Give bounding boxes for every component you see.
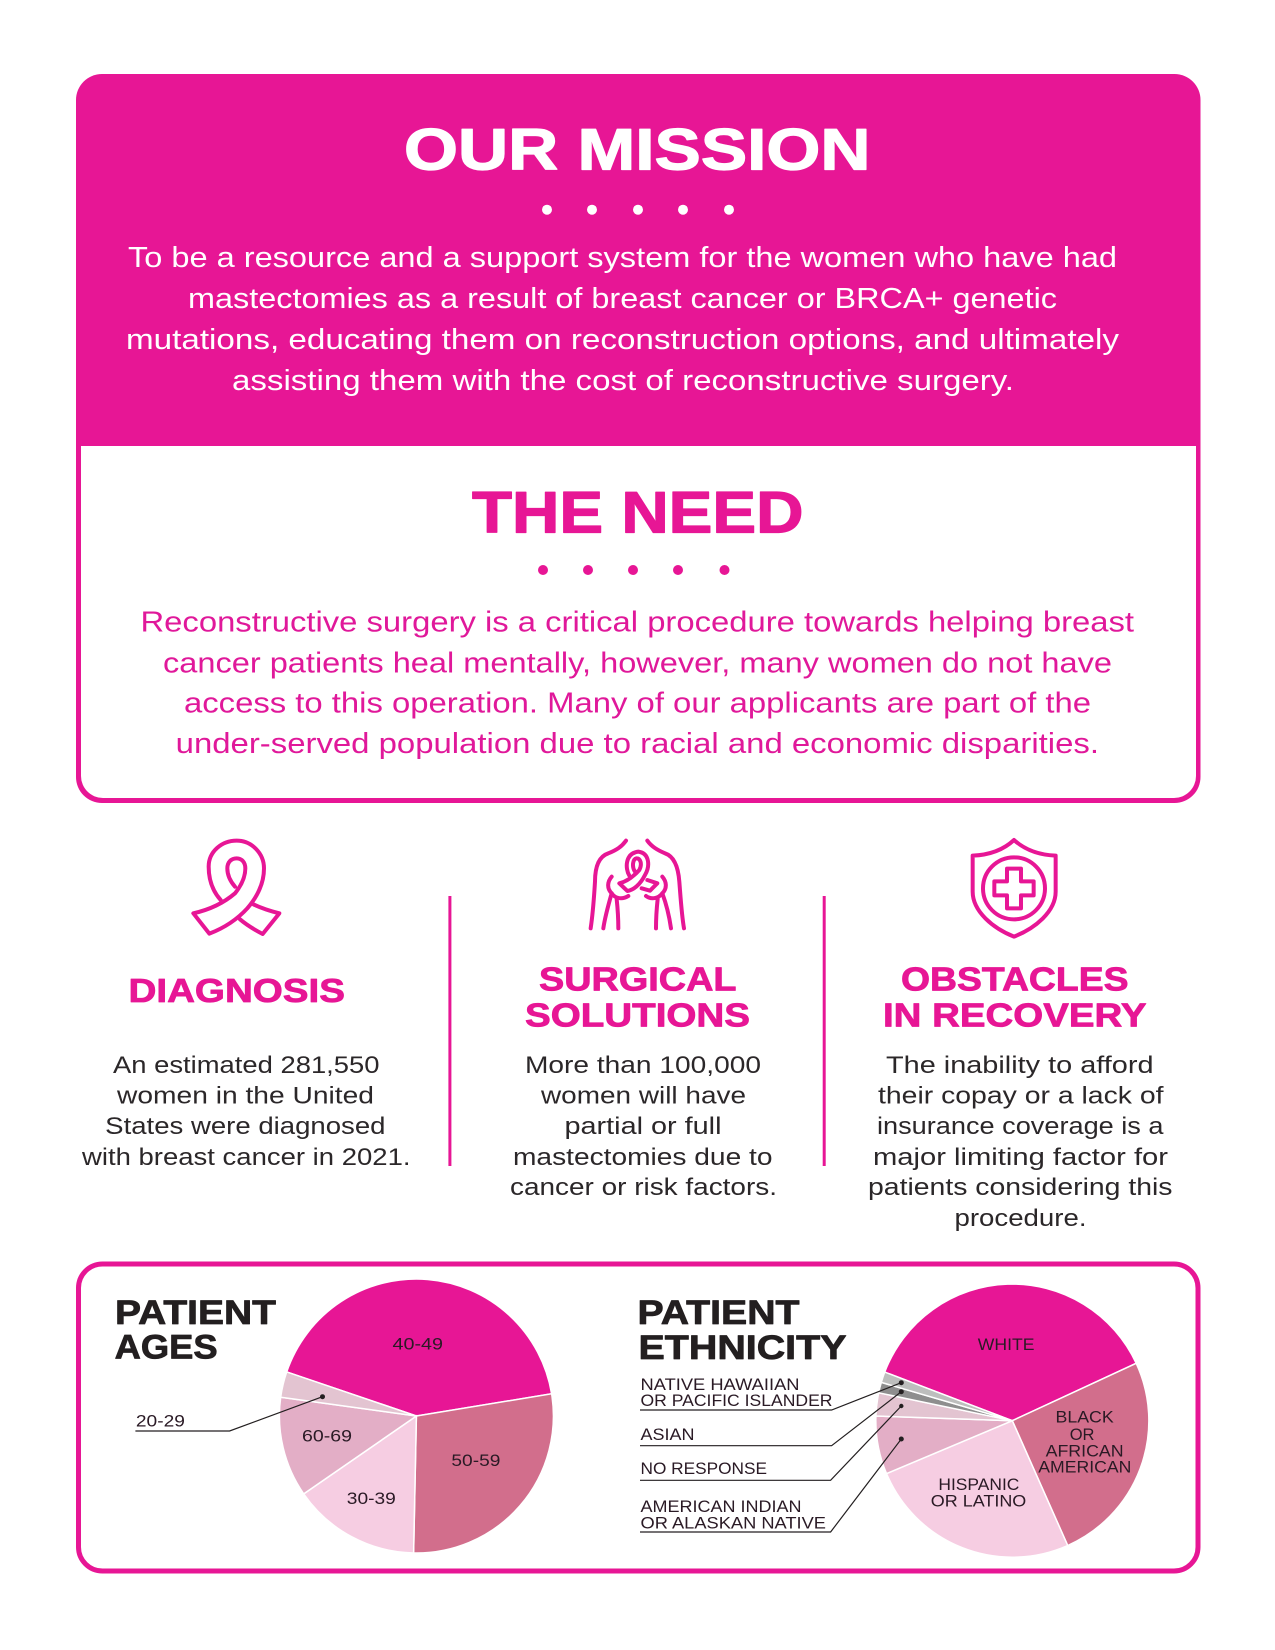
text: diagnosis copy: States were diagnosed	[105, 1113, 385, 1140]
text: diagnosis copy: with breast cancer in 2021.	[81, 1144, 411, 1171]
text: diagnosis copy: women in the United	[116, 1083, 374, 1110]
labels: ethnicity slices	[931, 1336, 1131, 1511]
text block: need statement: access to this operation. Many of our applicants are part of the	[184, 688, 1091, 720]
text: obstacles copy	[868, 1052, 1172, 1232]
heading: surgical solutions: SURGICAL	[539, 961, 736, 998]
heading: the need: THE NEED	[472, 480, 804, 546]
callout: native hawaiian or pacific islander: OR PACIFIC ISLANDER	[640, 1392, 833, 1410]
heading: surgical solutions	[525, 961, 750, 1034]
text: diagnosis copy: An estimated 281,550	[113, 1052, 380, 1079]
text: surgical copy	[510, 1052, 777, 1201]
heading: obstacles in recovery: IN RECOVERY	[883, 997, 1146, 1034]
heading: patient ages	[115, 1294, 276, 1367]
heading: surgical solutions: SOLUTIONS	[525, 997, 750, 1034]
panel: mission and need card	[76, 74, 1200, 803]
callout: american indian or alaskan native	[640, 1436, 904, 1533]
icon: awareness ribbon	[193, 841, 279, 934]
labels: ethnicity slices: AFRICAN	[1046, 1443, 1124, 1461]
labels: ethnicity slices: OR LATINO	[931, 1493, 1026, 1511]
labels: age slices	[302, 1335, 500, 1508]
labels: age slices: 40-49	[392, 1335, 443, 1353]
icon: torso with ribbon	[591, 841, 684, 928]
labels: age slices: 60-69	[302, 1428, 352, 1446]
heading: patient ages: PATIENT	[115, 1294, 276, 1332]
icon: medical shield	[973, 840, 1056, 937]
labels: ethnicity slices: HISPANIC	[938, 1476, 1019, 1494]
labels: ethnicity slices: BLACK	[1056, 1409, 1114, 1427]
column: obstacles in recovery	[868, 840, 1172, 1232]
text: obstacles copy: their copay or a lack of	[878, 1083, 1164, 1110]
callout: american indian or alaskan native: AMERICAN INDIAN	[640, 1498, 802, 1516]
callout: 20-29	[135, 1394, 325, 1431]
heading: obstacles in recovery: OBSTACLES	[901, 961, 1128, 998]
text block: need statement: cancer patients heal mentally, however, many women do not have	[163, 648, 1112, 680]
pie chart: patient ethnicity	[876, 1284, 1149, 1557]
callout: native hawaiian or pacific islander	[640, 1376, 904, 1410]
text block: mission statement: assisting them with the cost of reconstructive surgery.	[232, 365, 1014, 397]
text block: need statement: Reconstructive surgery is a critical procedure towards helping breast	[140, 606, 1134, 638]
text block: mission statement: mutations, educating them on reconstruction options, and ultimately	[126, 324, 1120, 356]
dots: need divider	[538, 565, 730, 575]
heading: patient ages: AGES	[115, 1329, 218, 1367]
heading: patient ethnicity: ETHNICITY	[638, 1329, 847, 1367]
dots: mission divider	[542, 205, 734, 215]
callout: 20-29: 20-29	[136, 1413, 185, 1431]
text: surgical copy: women will have	[540, 1083, 746, 1110]
labels: age slices: 30-39	[347, 1490, 396, 1508]
text: surgical copy: cancer or risk factors.	[510, 1174, 777, 1201]
callout: no response	[640, 1404, 904, 1480]
labels: age slices: 50-59	[451, 1452, 500, 1470]
text: obstacles copy: patients considering this	[868, 1174, 1172, 1201]
text block: mission statement: mastectomies as a result of breast cancer or BRCA+ genetic	[188, 283, 1057, 315]
heading: diagnosis: DIAGNOSIS	[128, 972, 345, 1009]
labels: ethnicity slices: OR	[1070, 1426, 1095, 1444]
labels: ethnicity slices: AMERICAN	[1038, 1459, 1131, 1477]
callout: asian	[640, 1389, 904, 1446]
text: obstacles copy: procedure.	[954, 1205, 1086, 1232]
text: surgical copy: More than 100,000	[525, 1052, 761, 1079]
text block: need statement: under-served population due to racial and economic disparities.	[176, 728, 1099, 760]
divider: right	[823, 896, 826, 1166]
heading: obstacles in recovery	[883, 961, 1146, 1034]
heading: our mission: OUR MISSION	[404, 118, 870, 182]
pie chart: patient ages	[279, 1279, 553, 1553]
callout: native hawaiian or pacific islander: NATIVE HAWAIIAN	[640, 1376, 800, 1394]
callout: american indian or alaskan native: OR ALASKAN NATIVE	[640, 1515, 826, 1533]
text: obstacles copy: insurance coverage is a	[877, 1113, 1164, 1140]
heading: patient ethnicity	[638, 1294, 847, 1367]
text: obstacles copy: major limiting factor for	[873, 1144, 1168, 1171]
text block: mission statement	[126, 242, 1120, 397]
divider: left	[448, 896, 451, 1166]
text: diagnosis copy	[81, 1052, 411, 1171]
labels: ethnicity slices: WHITE	[978, 1336, 1034, 1354]
callout: no response: NO RESPONSE	[640, 1460, 767, 1478]
text: obstacles copy: The inability to afford	[886, 1052, 1154, 1079]
text: surgical copy: partial or full	[564, 1113, 722, 1140]
heading: patient ethnicity: PATIENT	[638, 1294, 800, 1332]
callout: asian: ASIAN	[640, 1426, 694, 1444]
column: diagnosis	[81, 841, 411, 1171]
text block: need statement	[140, 606, 1134, 760]
text block: mission statement: To be a resource and a support system for the women who have had	[128, 242, 1117, 274]
column: surgical solutions	[510, 841, 777, 1201]
panel: patient charts	[78, 1264, 1198, 1571]
text: surgical copy: mastectomies due to	[513, 1144, 772, 1171]
